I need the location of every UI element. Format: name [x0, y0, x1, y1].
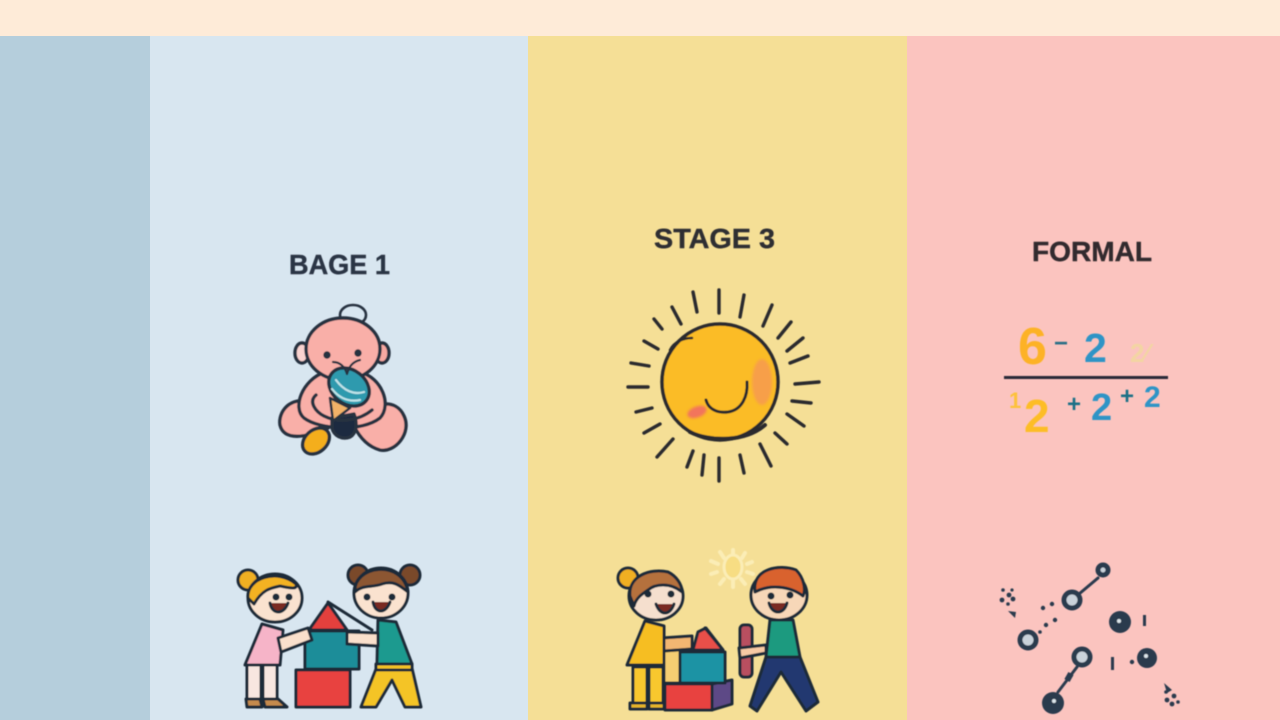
icon: smiling sun: [628, 290, 819, 481]
equation: 1: [1009, 388, 1021, 413]
heading: BAGE 1: BAGE 1: [289, 249, 390, 280]
equation: 2: [1084, 325, 1107, 371]
equation: +: [1120, 383, 1134, 410]
equation: −: [1054, 330, 1068, 357]
top band: [0, 0, 1280, 36]
small faint sun: [711, 550, 753, 587]
equation: 2: [1091, 387, 1112, 429]
equation: [1004, 318, 1168, 442]
sun cheeks: [686, 359, 772, 421]
equation: 2: [1144, 381, 1161, 414]
panel: stage 3: [528, 36, 907, 720]
equation: 2: [1024, 390, 1050, 442]
icon: baby with rattle: [280, 305, 406, 459]
heading: FORMAL: FORMAL: [1032, 236, 1152, 267]
panel: stage 1: [150, 36, 528, 720]
heading: STAGE 3: STAGE 3: [654, 223, 775, 254]
panel: formal: [907, 36, 1280, 720]
icon: molecule network: [1000, 565, 1180, 714]
equation: 2⁄: [1130, 338, 1154, 368]
illustration: two children with blocks and small sun: [618, 550, 818, 711]
equation: +: [1067, 391, 1081, 418]
panel: left blue strip: [0, 36, 150, 720]
equation: 6: [1018, 318, 1047, 376]
illustration: two children building blocks: [238, 565, 421, 707]
